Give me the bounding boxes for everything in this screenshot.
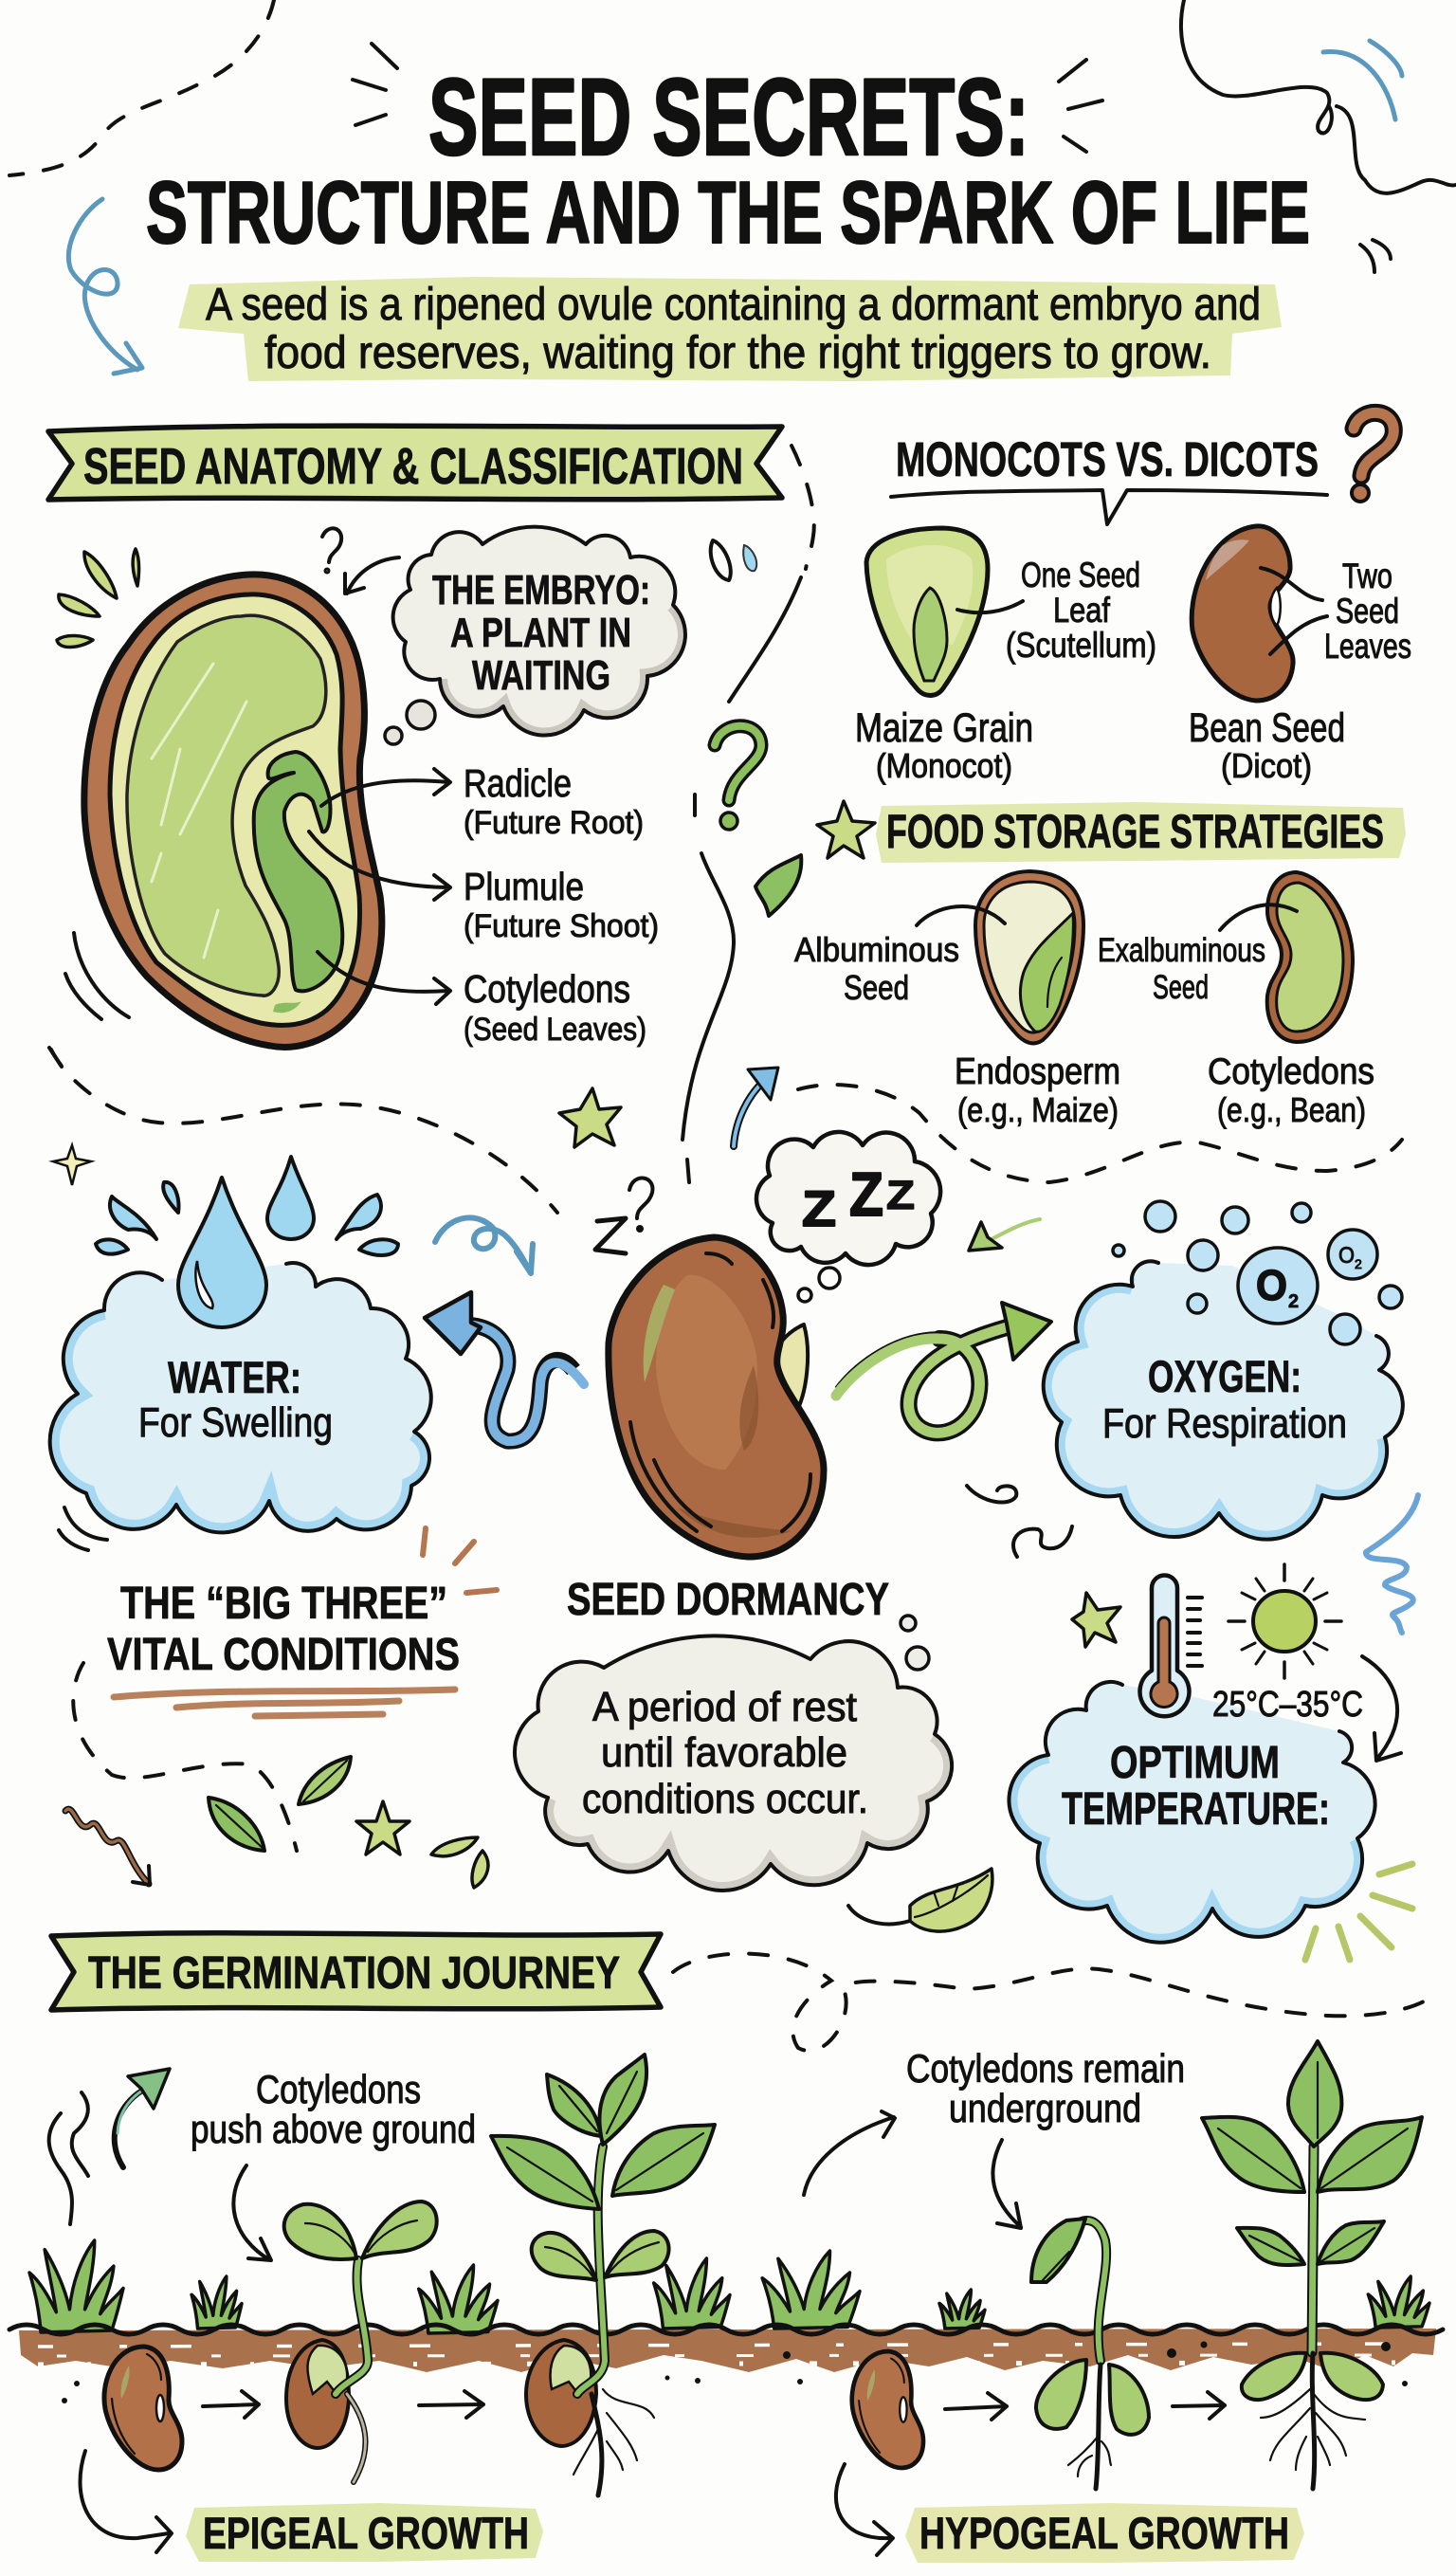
decoration: small swirls xyxy=(967,1486,1072,1557)
embryo xyxy=(254,752,342,991)
icon: z question marks xyxy=(595,1178,652,1253)
icon: star xyxy=(817,801,875,858)
label: endosperm xyxy=(955,1051,1120,1129)
decoration: dashed loop line xyxy=(673,1953,1435,2051)
arrow: curved to temperature cloud xyxy=(1362,1656,1401,1761)
arrow: small green up arrow xyxy=(115,2069,170,2167)
heading: big three: VITAL CONDITIONS xyxy=(107,1630,460,1680)
label: bean seed xyxy=(1189,705,1345,785)
label: maize grain: (Monocot) xyxy=(876,746,1012,785)
label: cotyledons push above ground: Cotyledons xyxy=(256,2067,421,2111)
labels: radicle xyxy=(464,761,644,841)
label: exalbuminous seed: Seed xyxy=(1153,969,1209,1006)
arrow: to epigeal label xyxy=(81,2451,172,2552)
cloud: water: For Swelling xyxy=(138,1399,333,1446)
decoration: motion arcs xyxy=(49,933,129,1067)
heading: seed dormancy: SEED DORMANCY xyxy=(567,1575,889,1625)
label: cotyledons push above ground: push above ground xyxy=(191,2107,476,2151)
cloud: temperature: OPTIMUM xyxy=(1110,1738,1280,1788)
intro text with highlight xyxy=(178,277,1282,381)
decoration: lime petals xyxy=(57,549,139,648)
cloud: zzz: Z xyxy=(849,1160,883,1229)
label: cotyledons bean: (e.g., Bean) xyxy=(1217,1090,1366,1129)
decoration: dashed loop xyxy=(73,1663,297,1851)
arrow: small green arrow xyxy=(969,1219,1040,1251)
icon: oxygen bubbles: 2 xyxy=(1288,1291,1299,1312)
seed coat xyxy=(84,575,382,1047)
highlight band xyxy=(178,277,1282,381)
icon: oxygen bubbles: 2 xyxy=(1355,1256,1362,1271)
cloud: oxygen xyxy=(1033,1251,1412,1540)
icon: star xyxy=(559,1088,621,1147)
callout: the embryo: WAITING xyxy=(472,652,610,699)
illustration: dormant seed xyxy=(609,1237,824,1557)
label: hypogeal growth xyxy=(905,2503,1304,2563)
banner: germination journey xyxy=(51,1933,661,2010)
arrow: hypogeal stage 1 to 2 xyxy=(945,2393,1007,2420)
labels: two seed leaves: Seed xyxy=(1336,592,1399,630)
labels: one seed leaf: One Seed xyxy=(1021,556,1140,594)
arrow: brown squiggle xyxy=(65,1809,150,1885)
banner: seed anatomy xyxy=(48,426,782,500)
hypogeal stage 2: hooked seedling xyxy=(1031,2219,1149,2489)
icon: oxygen bubbles: O xyxy=(1338,1243,1355,1269)
callout: the embryo xyxy=(393,527,685,736)
label: temperature range: 25°C–35°C xyxy=(1212,1685,1363,1725)
arrow: green loop arrow xyxy=(836,1303,1051,1433)
icon: sun xyxy=(1228,1564,1341,1678)
arrow: to hypogeal label xyxy=(836,2464,893,2555)
callout bubbles: dormancy xyxy=(901,1616,929,1670)
cloud: dormancy: A period of rest xyxy=(592,1684,857,1730)
labels: one seed leaf: Leaf xyxy=(1053,591,1111,630)
label: bean seed: Bean Seed xyxy=(1189,705,1345,751)
cloud: dormancy: conditions occur. xyxy=(582,1776,868,1822)
icon: oxygen bubbles: O xyxy=(1256,1261,1287,1309)
decoration: central squiggle xyxy=(682,446,814,1182)
label: albuminous seed: Albuminous xyxy=(794,930,959,969)
callout bubbles xyxy=(385,701,435,744)
decoration: top-right blue arcs xyxy=(1323,41,1402,119)
cloud: temperature xyxy=(995,1669,1393,1943)
hypogeal stage 3: plant xyxy=(1202,2041,1422,2489)
banner text: SEED ANATOMY & CLASSIFICATION xyxy=(83,438,743,495)
label: maize grain xyxy=(855,705,1033,785)
heading: big three xyxy=(107,1579,460,1716)
label: albuminous seed xyxy=(794,930,959,1007)
banner: germination journey: THE GERMINATION JOURNEY xyxy=(88,1948,620,1999)
icon: leaves xyxy=(209,1757,488,1888)
arrow: blue loop arrow at left xyxy=(68,199,142,374)
icon: star xyxy=(1072,1593,1120,1647)
icon: albuminous seed xyxy=(917,871,1083,1043)
cloud: dormancy xyxy=(515,1635,952,1891)
decoration: lime rays xyxy=(1305,1864,1412,1960)
cloud: temperature: TEMPERATURE: xyxy=(1062,1784,1330,1835)
soil band xyxy=(19,2329,1436,2372)
decoration: blue wavy line xyxy=(1366,1495,1418,1633)
icon: small drops xyxy=(711,540,756,580)
callout: the embryo: THE EMBRYO: xyxy=(432,567,650,613)
cloud: zzz xyxy=(756,1132,940,1265)
labels: plumule: (Future Shoot) xyxy=(464,908,659,944)
arrow: up to label xyxy=(804,2111,895,2195)
arrow: small blue up arrow xyxy=(734,1068,778,1146)
label: endosperm: Endosperm xyxy=(955,1051,1120,1092)
heading: big three: THE “BIG THREE” xyxy=(120,1579,447,1629)
cloud: dormancy: until favorable xyxy=(601,1729,847,1776)
labels: radicle: (Future Root) xyxy=(464,805,644,841)
icon: sparkle xyxy=(53,1145,91,1185)
labels: cotyledons: Cotyledons xyxy=(464,967,630,1011)
arrow: epigeal stage 1 to 2 xyxy=(203,2391,259,2418)
cotyledon xyxy=(127,615,326,996)
callout: the embryo: A PLANT IN xyxy=(450,610,631,656)
arrow: to big bean xyxy=(345,557,399,594)
label: cotyledons push above ground xyxy=(191,2067,476,2151)
icon: green question mark xyxy=(715,726,761,830)
label: epigeal growth xyxy=(186,2503,543,2562)
label: exalbuminous seed: Exalbuminous xyxy=(1098,932,1265,969)
label: cotyledons bean xyxy=(1208,1051,1374,1129)
cloud: zzz: Z xyxy=(802,1181,836,1237)
diagram: big bean anatomy xyxy=(84,575,450,1047)
cloud: water xyxy=(47,1261,433,1534)
drop highlight xyxy=(195,1261,213,1308)
epigeal stage 1: bean xyxy=(104,2347,182,2470)
label: albuminous seed: Seed xyxy=(844,968,909,1007)
label: cotyledons remain underground xyxy=(906,2046,1185,2130)
hypogeal stage 1: bean xyxy=(852,2351,923,2468)
decoration: dashed curve right xyxy=(798,1085,1402,1182)
intro line 2: food reserves, waiting for the right triggers to grow. xyxy=(264,328,1211,378)
cloud: oxygen: OXYGEN: xyxy=(1148,1351,1301,1401)
soil specks xyxy=(62,2342,1408,2403)
decoration: brown ticks xyxy=(423,1528,497,1593)
intro line 1: A seed is a ripened ovule containing a dormant embryo and xyxy=(206,280,1261,330)
cloud: oxygen: For Respiration xyxy=(1102,1400,1347,1447)
decoration: title ticks xyxy=(353,44,1102,152)
heading: monocots vs dicots xyxy=(891,432,1327,524)
label arrows xyxy=(309,769,450,1004)
label: maize grain: Maize Grain xyxy=(855,705,1033,751)
labels: radicle: Radicle xyxy=(464,761,572,805)
title line 1: SEED SECRETS: xyxy=(428,57,1029,178)
labels: cotyledons: (Seed Leaves) xyxy=(464,1012,646,1048)
icon: small leaf xyxy=(755,855,801,916)
labels: two seed leaves: Two xyxy=(1342,557,1392,595)
labels: one seed leaf: (Scutellum) xyxy=(1006,626,1156,665)
cloud: water: WATER: xyxy=(168,1352,301,1402)
labels: plumule: Plumule xyxy=(464,865,584,908)
title xyxy=(146,57,1310,262)
epigeal stage 3: plant xyxy=(491,2055,715,2495)
labels: cotyledons xyxy=(464,967,646,1048)
decoration: motion arcs under water xyxy=(59,1507,107,1550)
icon: small question mark xyxy=(322,528,341,573)
cloud: zzz: Z xyxy=(886,1173,915,1218)
icon: star xyxy=(356,1801,410,1854)
label: hypogeal growth: HYPOGEAL GROWTH xyxy=(919,2508,1289,2558)
icon: thermometer xyxy=(1139,1576,1202,1716)
arrow: blue swirl xyxy=(435,1217,533,1273)
icon: maize grain xyxy=(866,528,1023,696)
icon: water drops xyxy=(96,1157,398,1327)
labels: plumule xyxy=(464,865,659,944)
label: exalbuminous seed xyxy=(1098,932,1265,1006)
label: epigeal growth: EPIGEAL GROWTH xyxy=(203,2508,529,2558)
labels: two seed leaves: Leaves xyxy=(1324,627,1411,666)
label: cotyledons remain underground: Cotyledons remain xyxy=(906,2046,1185,2091)
ground line xyxy=(9,2325,1443,2334)
drop over cloud xyxy=(178,1178,266,1327)
decoration: wavy smoke lines xyxy=(49,2092,88,2224)
icon: oxygen bubbles xyxy=(1113,1201,1402,1344)
label: endosperm: (e.g., Maize) xyxy=(957,1090,1119,1129)
icon: exalbuminous seed xyxy=(1220,872,1353,1042)
grass clumps xyxy=(29,2240,1429,2333)
decoration: top-right squiggle xyxy=(1181,0,1456,193)
epigeal stage 2: seedling xyxy=(284,2201,437,2482)
arrow: to cotyledons above ground xyxy=(233,2165,271,2260)
arrow: blue water arrow xyxy=(425,1292,584,1441)
heading: monocots vs dicots: MONOCOTS VS. DICOTS xyxy=(896,432,1319,486)
decoration: top-left dashed curve xyxy=(9,0,274,175)
arrow: epigeal stage 2 to 3 xyxy=(419,2391,483,2418)
icon: bean seed xyxy=(1192,526,1327,701)
labels: two seed leaves xyxy=(1324,557,1411,666)
icon: leaf with stem xyxy=(848,1869,992,1931)
labels: one seed leaf xyxy=(1006,556,1156,665)
decoration: small black arcs xyxy=(1360,240,1391,272)
bubbles: zzz xyxy=(798,1268,840,1302)
icon: brown question mark xyxy=(1352,412,1393,502)
decoration: dashed curve left xyxy=(51,1050,557,1213)
label: cotyledons remain underground: underground xyxy=(949,2086,1141,2130)
label: bean seed: (Dicot) xyxy=(1221,746,1312,785)
arrow: hypogeal stage 2 to 3 xyxy=(1173,2392,1225,2419)
endosperm layer xyxy=(110,594,360,1025)
arrow: to hooked seedling xyxy=(992,2140,1021,2228)
label: cotyledons bean: Cotyledons xyxy=(1208,1051,1374,1092)
